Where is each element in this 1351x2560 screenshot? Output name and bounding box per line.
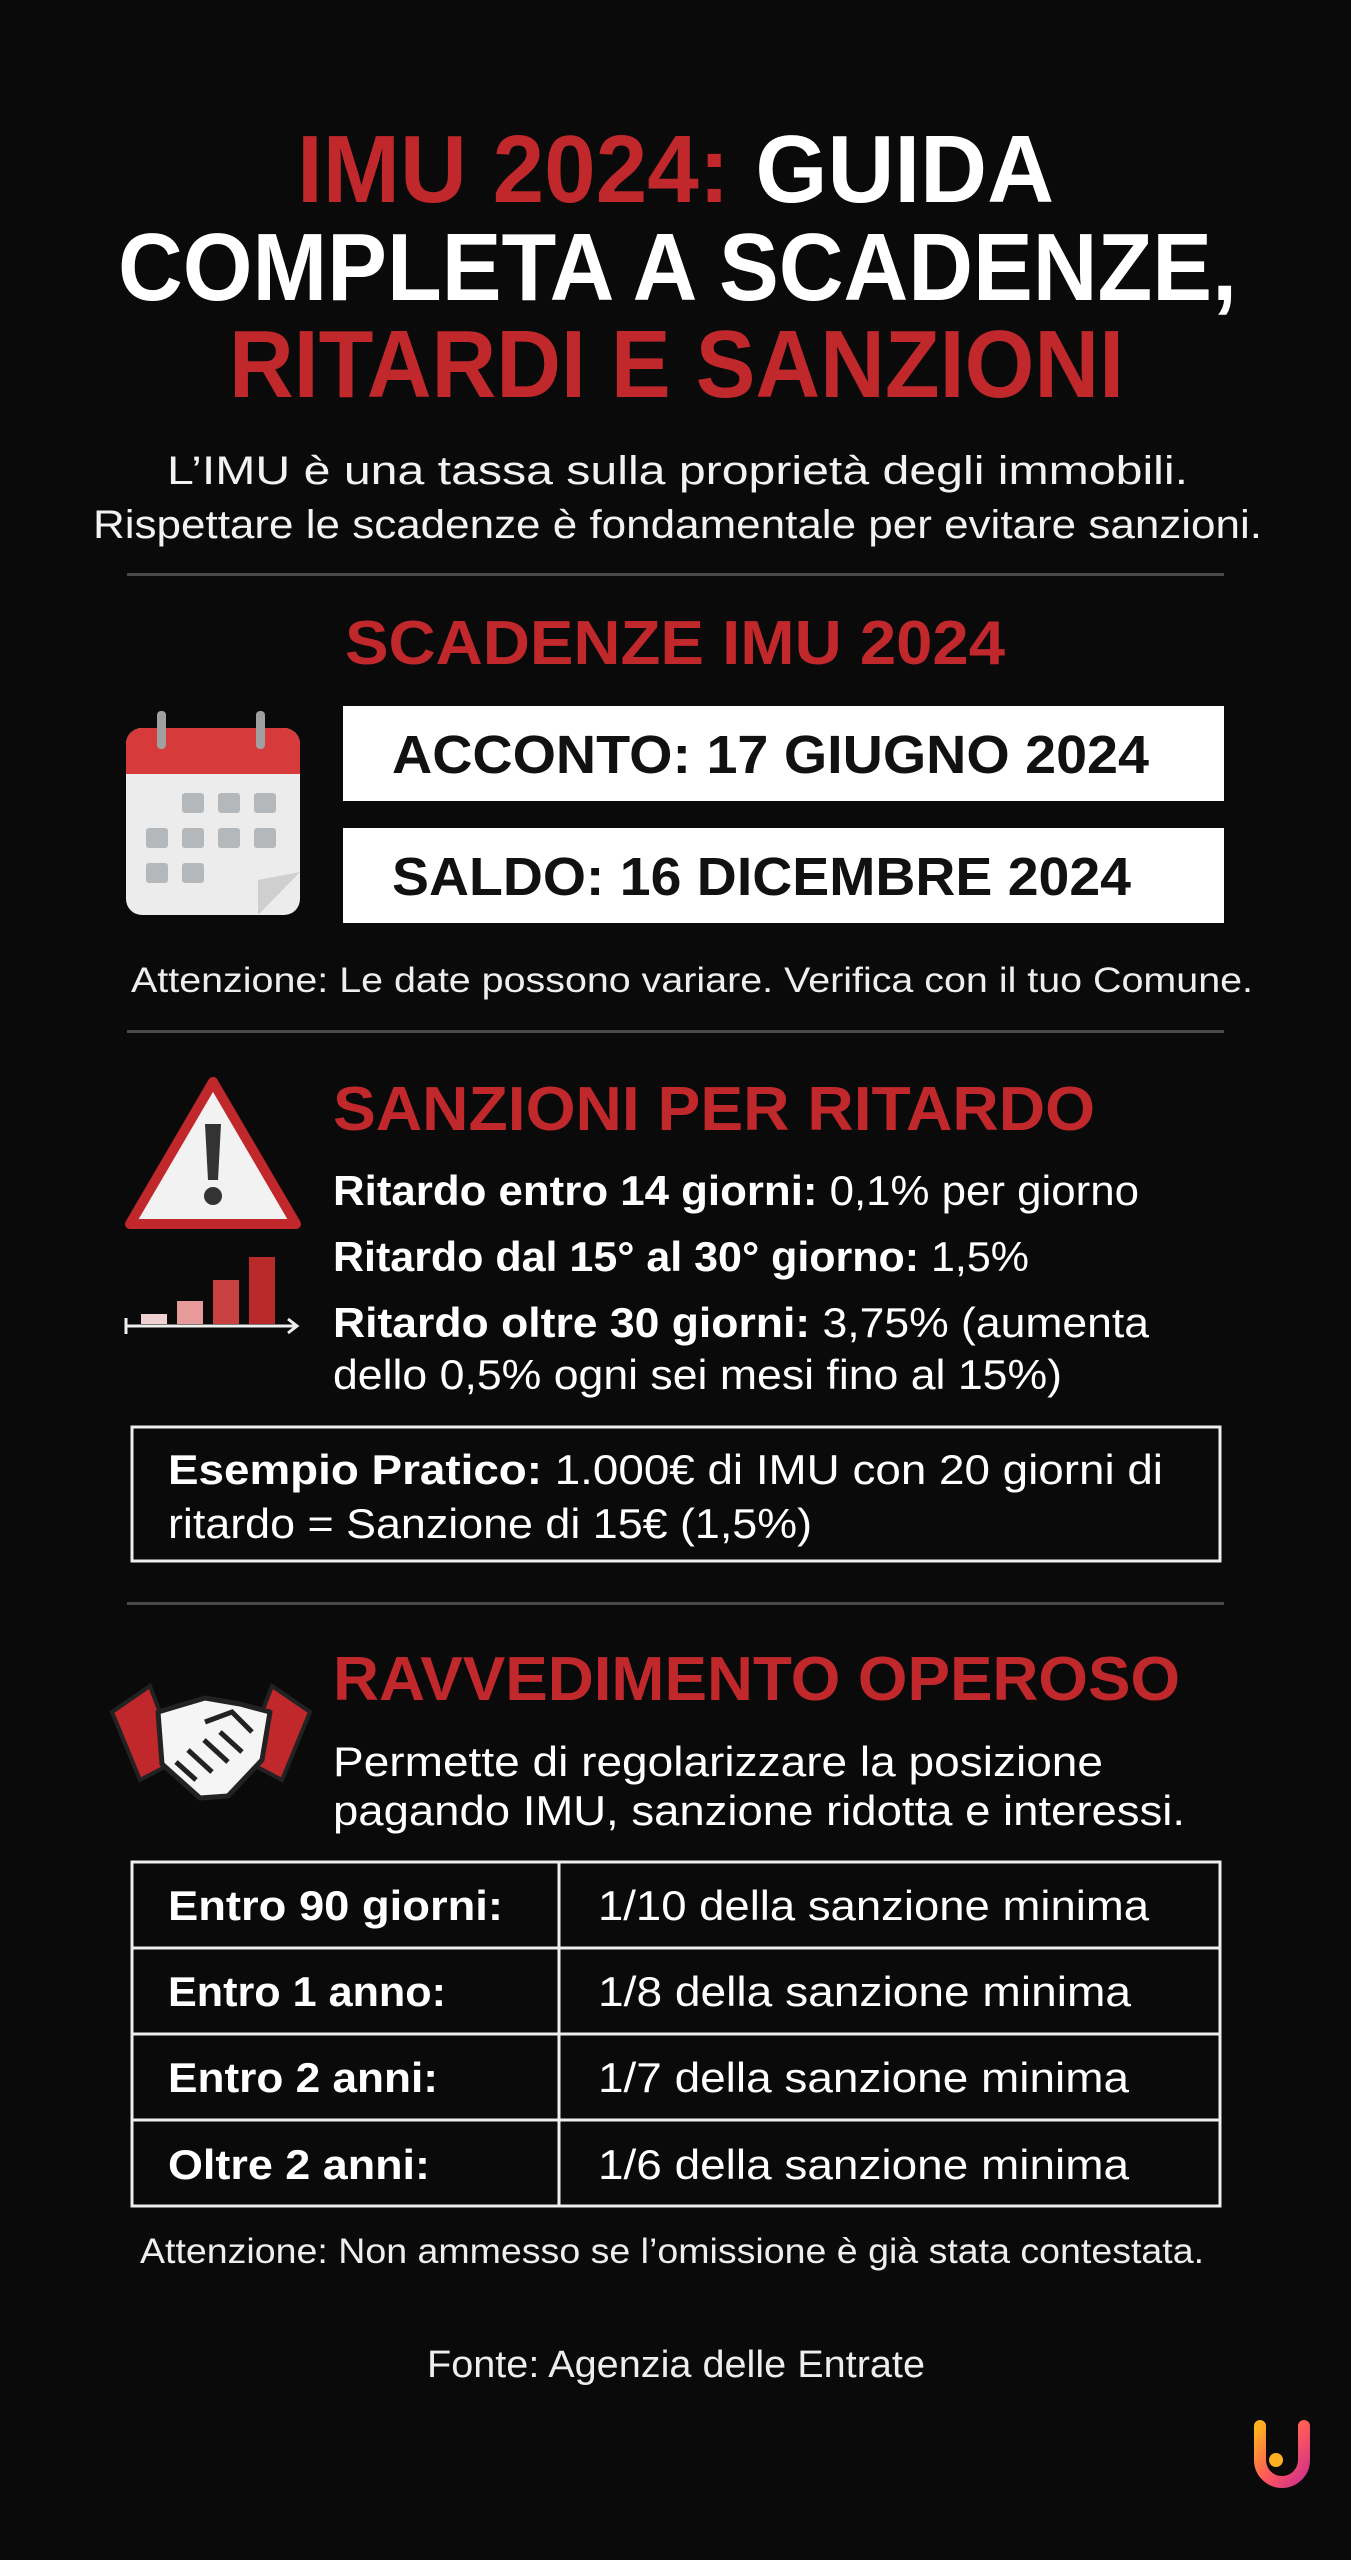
table: ravvedimento: 1/6 della sanzione minima xyxy=(598,2141,1130,2188)
list: sanzioni: Ritardo oltre 30 giorni: 3,75% (aumenta xyxy=(333,1299,1150,1346)
table: ravvedimento: Entro 2 anni: xyxy=(168,2054,438,2101)
table: ravvedimento: Oltre 2 anni: xyxy=(168,2141,430,2188)
list: sanzioni xyxy=(333,1167,1150,1398)
icon: bar chart xyxy=(126,1257,297,1334)
note: ravvedimento: Attenzione: Non ammesso se l’omissione è già stata contestata. xyxy=(140,2232,1204,2271)
list: sanzioni: Ritardo dal 15° al 30° giorno: 1,5% xyxy=(333,1233,1029,1280)
text: ravvedimento xyxy=(333,1738,1185,1834)
heading: sanzioni: SANZIONI PER RITARDO xyxy=(333,1075,1095,1144)
table: ravvedimento xyxy=(132,1862,1220,2206)
table: ravvedimento: 1/10 della sanzione minima xyxy=(598,1882,1150,1929)
box: acconto: ACCONTO: 17 GIUGNO 2024 xyxy=(392,725,1149,785)
table: ravvedimento: 1/8 della sanzione minima xyxy=(598,1968,1132,2015)
table: ravvedimento: Entro 90 giorni: xyxy=(168,1882,503,1929)
box: acconto xyxy=(343,706,1224,801)
list: sanzioni: dello 0,5% ogni sei mesi fino al 15%) xyxy=(333,1351,1062,1398)
callout: esempio pratico: ritardo = Sanzione di 15€ (1,5%) xyxy=(168,1500,812,1547)
text: ravvedimento: Permette di regolarizzare la posizione xyxy=(333,1738,1103,1785)
list: sanzioni: Ritardo entro 14 giorni: 0,1% per giorno xyxy=(333,1167,1139,1214)
note: date: Attenzione: Le date possono variare. Verifica con il tuo Comune. xyxy=(131,961,1253,1000)
title: RITARDI E SANZIONI xyxy=(229,311,1124,418)
subtitle: Rispettare le scadenze è fondamentale per evitare sanzioni. xyxy=(93,503,1262,547)
subtitle: L’IMU è una tassa sulla proprietà degli immobili. xyxy=(167,449,1188,493)
table: ravvedimento: Entro 1 anno: xyxy=(168,1968,446,2015)
heading: scadenze: SCADENZE IMU 2024 xyxy=(345,609,1006,678)
icon: warning xyxy=(130,1082,296,1224)
source: Fonte: Agenzia delle Entrate xyxy=(427,2344,925,2386)
icon: calendar xyxy=(126,711,300,915)
box: saldo: SALDO: 16 DICEMBRE 2024 xyxy=(392,847,1131,907)
title xyxy=(118,116,1237,418)
icon: handshake xyxy=(112,1686,310,1798)
box: saldo xyxy=(343,828,1224,923)
text: ravvedimento: pagando IMU, sanzione ridotta e interessi. xyxy=(333,1787,1185,1834)
title: COMPLETA A SCADENZE, xyxy=(118,214,1237,321)
callout: esempio pratico xyxy=(132,1427,1220,1561)
subtitle xyxy=(93,449,1262,547)
heading: ravvedimento: RAVVEDIMENTO OPEROSO xyxy=(333,1645,1180,1714)
logo xyxy=(1260,2426,1304,2482)
title: IMU 2024: GUIDA xyxy=(297,116,1054,223)
callout: esempio pratico: Esempio Pratico: 1.000€ di IMU con 20 giorni di xyxy=(168,1446,1163,1493)
table: ravvedimento: 1/7 della sanzione minima xyxy=(598,2054,1130,2101)
